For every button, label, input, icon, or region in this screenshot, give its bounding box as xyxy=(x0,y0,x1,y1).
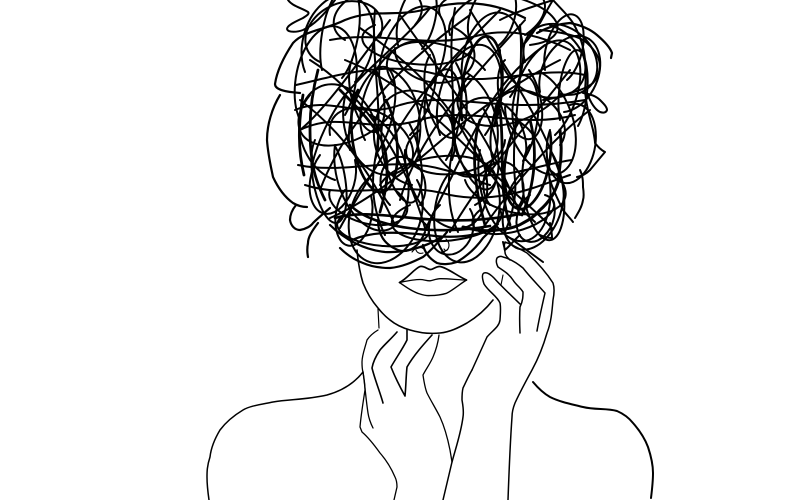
hand: right side of image xyxy=(443,238,554,500)
body: shoulders xyxy=(207,372,653,500)
scribble: long crossing strokes xyxy=(295,8,590,235)
scribble: middle row loops xyxy=(295,26,596,241)
scribble: tight vertical ellipses xyxy=(311,0,588,255)
eyes xyxy=(412,239,449,253)
hand: left side of image xyxy=(360,330,452,500)
scribble: outer stray ends xyxy=(267,0,612,257)
hair: tangled scribble xyxy=(267,0,612,268)
scribble: top row loops xyxy=(302,0,600,177)
lips xyxy=(400,266,466,296)
face: jaw and neck xyxy=(357,250,493,333)
scribble: bangs over the eyes xyxy=(330,220,498,268)
scribble: lower row loops xyxy=(299,84,566,263)
